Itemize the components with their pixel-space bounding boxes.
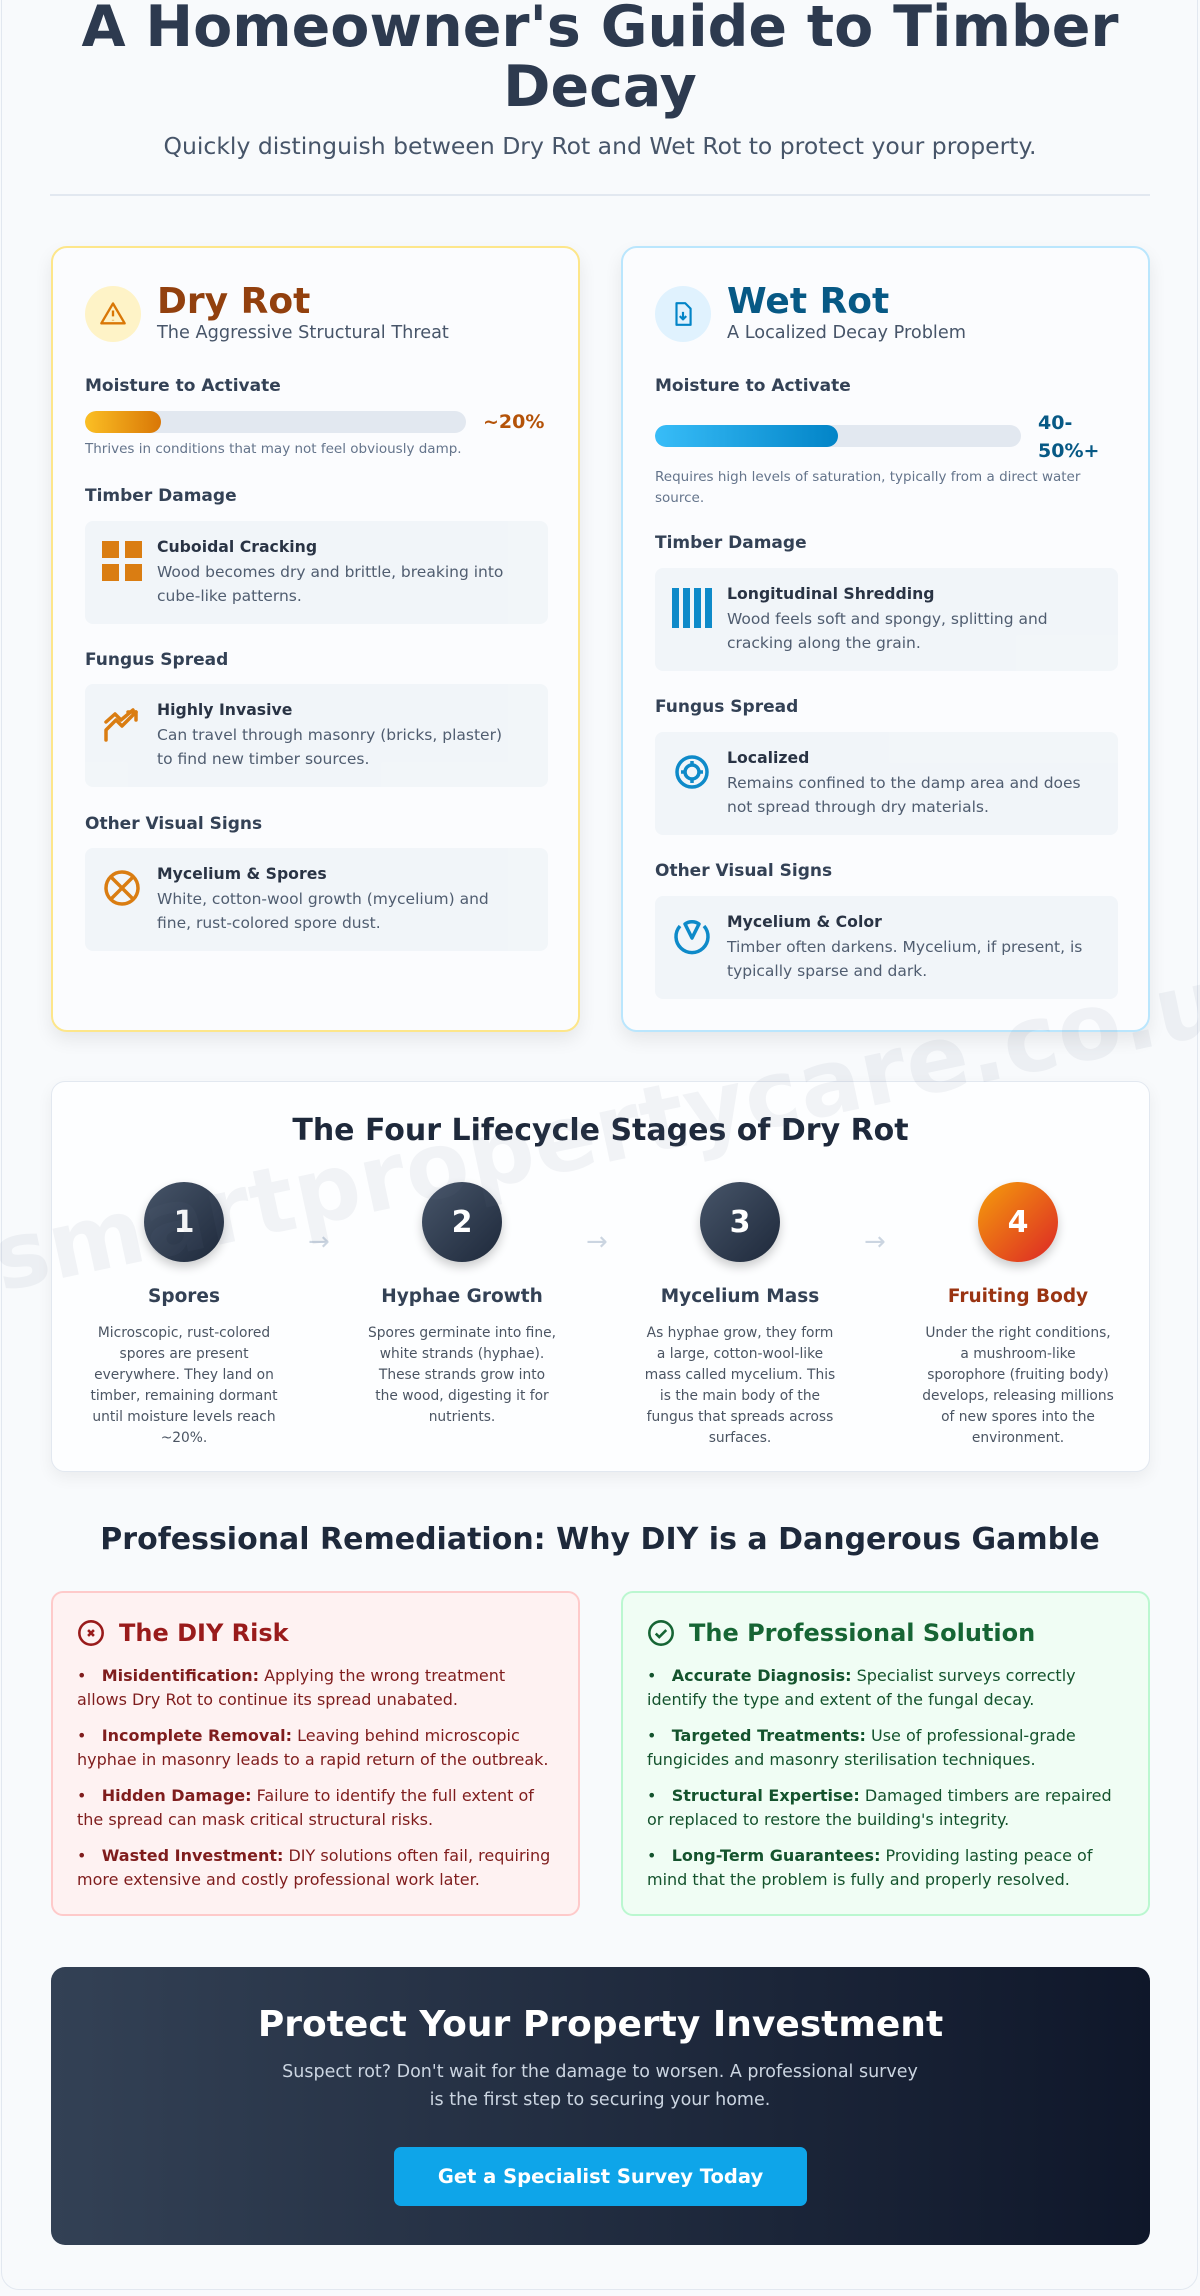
arrow 1: → xyxy=(308,1227,330,1257)
stage 3: 3 xyxy=(730,1204,750,1240)
heading: diy risk: The DIY Risk xyxy=(119,1619,289,1647)
item: localized: Remains confined to the damp area and does not spread through dry materials. xyxy=(727,774,1081,816)
stage 1 xyxy=(90,1182,278,1446)
label: fungus spread: Fungus Spread xyxy=(85,650,228,670)
value: 40-50%+ xyxy=(1038,412,1099,462)
panel: call to action xyxy=(51,1967,1150,2245)
icon: drop ring xyxy=(674,920,710,954)
item: mycelium & spores xyxy=(85,848,548,951)
item: highly invasive: Highly Invasive xyxy=(157,700,292,719)
item: highly invasive xyxy=(85,684,548,787)
arrow 2: → xyxy=(586,1227,608,1257)
subheading: The Aggressive Structural Threat xyxy=(157,323,449,343)
stage 1: 1 xyxy=(174,1204,194,1240)
icon: document xyxy=(655,286,711,342)
item: mycelium & color xyxy=(655,896,1118,999)
cta heading: Protect Your Property Investment xyxy=(258,2004,943,2045)
item: mycelium & color: Mycelium & Color xyxy=(727,912,882,931)
button xyxy=(394,2147,807,2206)
panel: lifecycle xyxy=(51,1081,1150,1472)
panel: diy risk: • Incomplete Removal: Leaving behind microscopic hyphae in masonry leads to a rapid return of the outbreak. xyxy=(77,1726,548,1769)
item: longitudinal shredding: Longitudinal Shredding xyxy=(727,584,934,603)
title: Decay xyxy=(503,54,697,120)
item: mycelium & spores: Mycelium & Spores xyxy=(157,864,327,883)
cta text: Suspect rot? Don't wait for the damage to worsen. A professional survey is the first step to securing your home. xyxy=(282,2062,918,2110)
panel: dry rot xyxy=(51,246,580,1032)
heading: dry rot: Dry Rot xyxy=(157,281,310,322)
item: mycelium & color: Timber often darkens. Mycelium, if present, is typically sparse and dark. xyxy=(727,938,1082,980)
panel: professional solution: • Structural Expertise: Damaged timbers are repaired or replaced to restore the building's integrity. xyxy=(647,1786,1112,1829)
panel: diy risk: • Misidentification: Applying the wrong treatment allows Dry Rot to continue its spread unabated. xyxy=(77,1666,505,1709)
label: timber damage: Timber Damage xyxy=(655,533,807,553)
stage 3: Mycelium Mass xyxy=(661,1286,819,1307)
stage 3: As hyphae grow, they form a large, cotton-wool-like mass called mycelium. This is the main body of the fungus that spreads across surfaces. xyxy=(645,1325,835,1446)
stage 2: Spores germinate into fine, white strands (hyphae). These strands grow into the wood, digesting it for nutrients. xyxy=(368,1325,556,1425)
stage 4: 4 xyxy=(1008,1204,1028,1240)
label: fungus spread: Fungus Spread xyxy=(655,697,798,717)
item: longitudinal shredding xyxy=(655,568,1118,671)
icon: grid xyxy=(102,541,142,581)
caption: Thrives in conditions that may not feel obviously damp. xyxy=(85,441,462,457)
stage 3 xyxy=(645,1182,835,1446)
stage 1: Microscopic, rust-colored spores are present everywhere. They land on timber, remaining dormant until moisture levels reach ~20%. xyxy=(90,1325,278,1446)
panel: diy risk: • Wasted Investment: DIY solutions often fail, requiring more extensive and costly professional work later. xyxy=(77,1846,550,1889)
panel: professional solution: • Accurate Diagnosis: Specialist surveys correctly identify the type and extent of the fungal decay. xyxy=(647,1666,1076,1709)
heading: professional solution: The Professional Solution xyxy=(689,1619,1035,1647)
label: visual signs: Other Visual Signs xyxy=(655,861,832,881)
item: cuboidal cracking: Cuboidal Cracking xyxy=(157,537,317,556)
heading: wet rot: Wet Rot xyxy=(727,281,889,322)
icon: warning xyxy=(85,286,141,342)
value: 40-50%+: 40- xyxy=(1038,412,1072,434)
bar: moisture 20% xyxy=(85,411,466,433)
label: timber damage: Timber Damage xyxy=(85,486,237,506)
label: visual signs: Other Visual Signs xyxy=(85,814,262,834)
item: highly invasive: Can travel through masonry (bricks, plaster) to find new timber sources. xyxy=(157,726,502,768)
icon: target xyxy=(675,755,709,789)
item: localized xyxy=(655,732,1118,835)
item: cuboidal cracking: Wood becomes dry and brittle, breaking into cube-like patterns. xyxy=(157,563,503,605)
icon: trend xyxy=(104,708,138,742)
heading: lifecycle: The Four Lifecycle Stages of Dry Rot xyxy=(292,1113,909,1148)
heading: remediation: Professional Remediation: Why DIY is a Dangerous Gamble xyxy=(100,1522,1100,1557)
button: Get a Specialist Survey Today xyxy=(438,2165,763,2188)
item: localized: Localized xyxy=(727,748,809,767)
arrow 3: → xyxy=(864,1227,886,1257)
subheading: A Localized Decay Problem xyxy=(727,323,966,343)
panel: professional solution: • Targeted Treatments: Use of professional-grade fungicides and masonry sterilisation techniques. xyxy=(647,1726,1076,1769)
label: moisture: Moisture to Activate xyxy=(655,376,851,396)
stage 4: Fruiting Body xyxy=(948,1286,1088,1307)
bar: moisture 50% xyxy=(655,425,1021,447)
panel: diy risk: • Hidden Damage: Failure to identify the full extent of the spread can mask critical structural risks. xyxy=(77,1786,534,1829)
item: mycelium & spores: White, cotton-wool growth (mycelium) and fine, rust-colored spore dust. xyxy=(157,890,489,932)
icon: crossed circle xyxy=(104,870,140,906)
panel: professional solution: • Long-Term Guarantees: Providing lasting peace of mind that the problem is fully and properly resolved. xyxy=(647,1846,1092,1889)
item: longitudinal shredding: Wood feels soft and spongy, splitting and cracking along the grain. xyxy=(727,610,1048,652)
stage 2 xyxy=(368,1182,556,1425)
panel: diy risk xyxy=(51,1591,580,1916)
caption: Requires high levels of saturation, typically from a direct water source. xyxy=(655,469,1080,506)
stage 2: 2 xyxy=(452,1204,472,1240)
icon: vertical bars xyxy=(672,588,712,628)
item: cuboidal cracking xyxy=(85,521,548,624)
subtitle: Quickly distinguish between Dry Rot and Wet Rot to protect your property. xyxy=(163,132,1036,160)
label: moisture: Moisture to Activate xyxy=(85,376,281,396)
value: ~20%: ~20% xyxy=(483,411,544,433)
stage 2: Hyphae Growth xyxy=(381,1286,543,1307)
panel: wet rot xyxy=(621,246,1150,1032)
title xyxy=(81,0,1119,120)
stage 4: Under the right conditions, a mushroom-like sporophore (fruiting body) develops, releasing millions of new spores into the environment. xyxy=(922,1325,1114,1446)
stage 1: Spores xyxy=(148,1286,220,1307)
value: 40-50%+: 50%+ xyxy=(1038,440,1099,462)
stage 4 xyxy=(922,1182,1114,1446)
panel: professional solution xyxy=(621,1591,1150,1916)
